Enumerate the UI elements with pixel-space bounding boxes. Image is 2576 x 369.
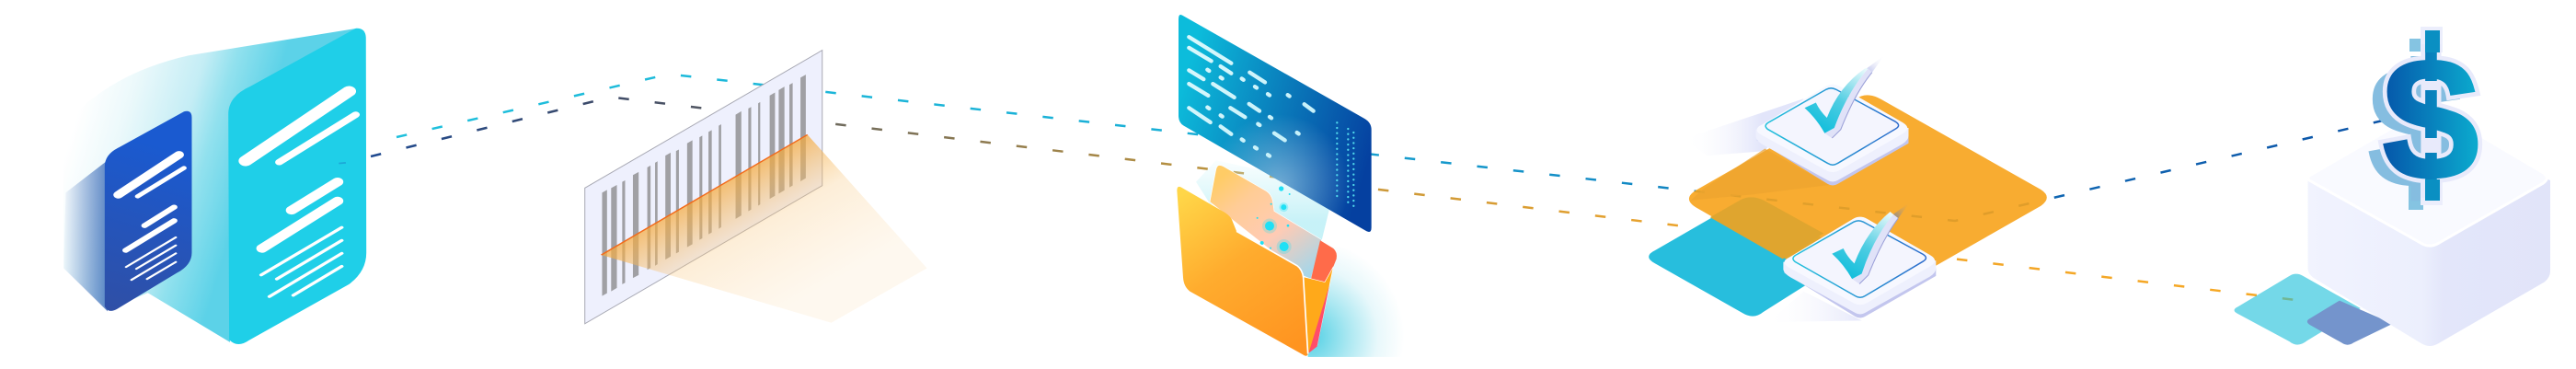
panel: barcode scan [585,51,927,324]
dashed connector: navy to orange [371,98,2318,303]
panel: data card and folder [1177,15,1419,357]
folder [1177,165,1337,356]
glow behind documents [63,29,356,342]
cyan document [228,29,366,344]
back sheet [1210,165,1322,279]
blue document [105,111,191,311]
dollar back layer: $ [2367,29,2465,225]
icon: dollar sign [2367,22,2479,225]
data card [1179,15,1372,232]
tile overlap [1710,197,1823,259]
dollar front layer: $ [2382,22,2479,217]
cyan glow under folder [1308,247,1419,357]
shadow on orange tile [1691,148,1830,201]
soft shadow: top tile [1685,98,1803,156]
check mark [1832,202,1910,284]
cube body [2308,123,2550,346]
light beam from card [1196,160,1331,247]
barcode bars [602,75,806,296]
checkbox tile: top [1756,55,1908,186]
orange tile [1689,95,2047,304]
check mark [1805,55,1884,138]
cyan tile [2235,274,2361,345]
checkbox tile: bottom [1783,202,1936,318]
dollar counter highlights [2424,81,2437,153]
cube top [2308,110,2547,246]
soft shadow: bottom tile [1768,292,1862,322]
dollar front layer: $ [2382,22,2479,217]
particles [1257,186,1292,254]
blue shadow beside small document [63,160,108,311]
scanner beam [602,134,927,323]
card data marks [1189,37,1314,156]
pink sliver [1308,285,1329,353]
scan line [602,134,808,255]
cyan tile [1649,199,1846,317]
panel: approval tiles [1649,55,2047,322]
panel: documents [63,29,366,344]
inner folder side [1304,267,1333,353]
card dot columns [1337,122,1353,210]
dashed connector: cyan to blue [397,74,2383,221]
barcode card [585,51,822,324]
front folder face [1177,187,1308,356]
panel: payment cube [2235,22,2550,346]
red flap [1311,240,1337,283]
blue tile [2307,301,2393,345]
